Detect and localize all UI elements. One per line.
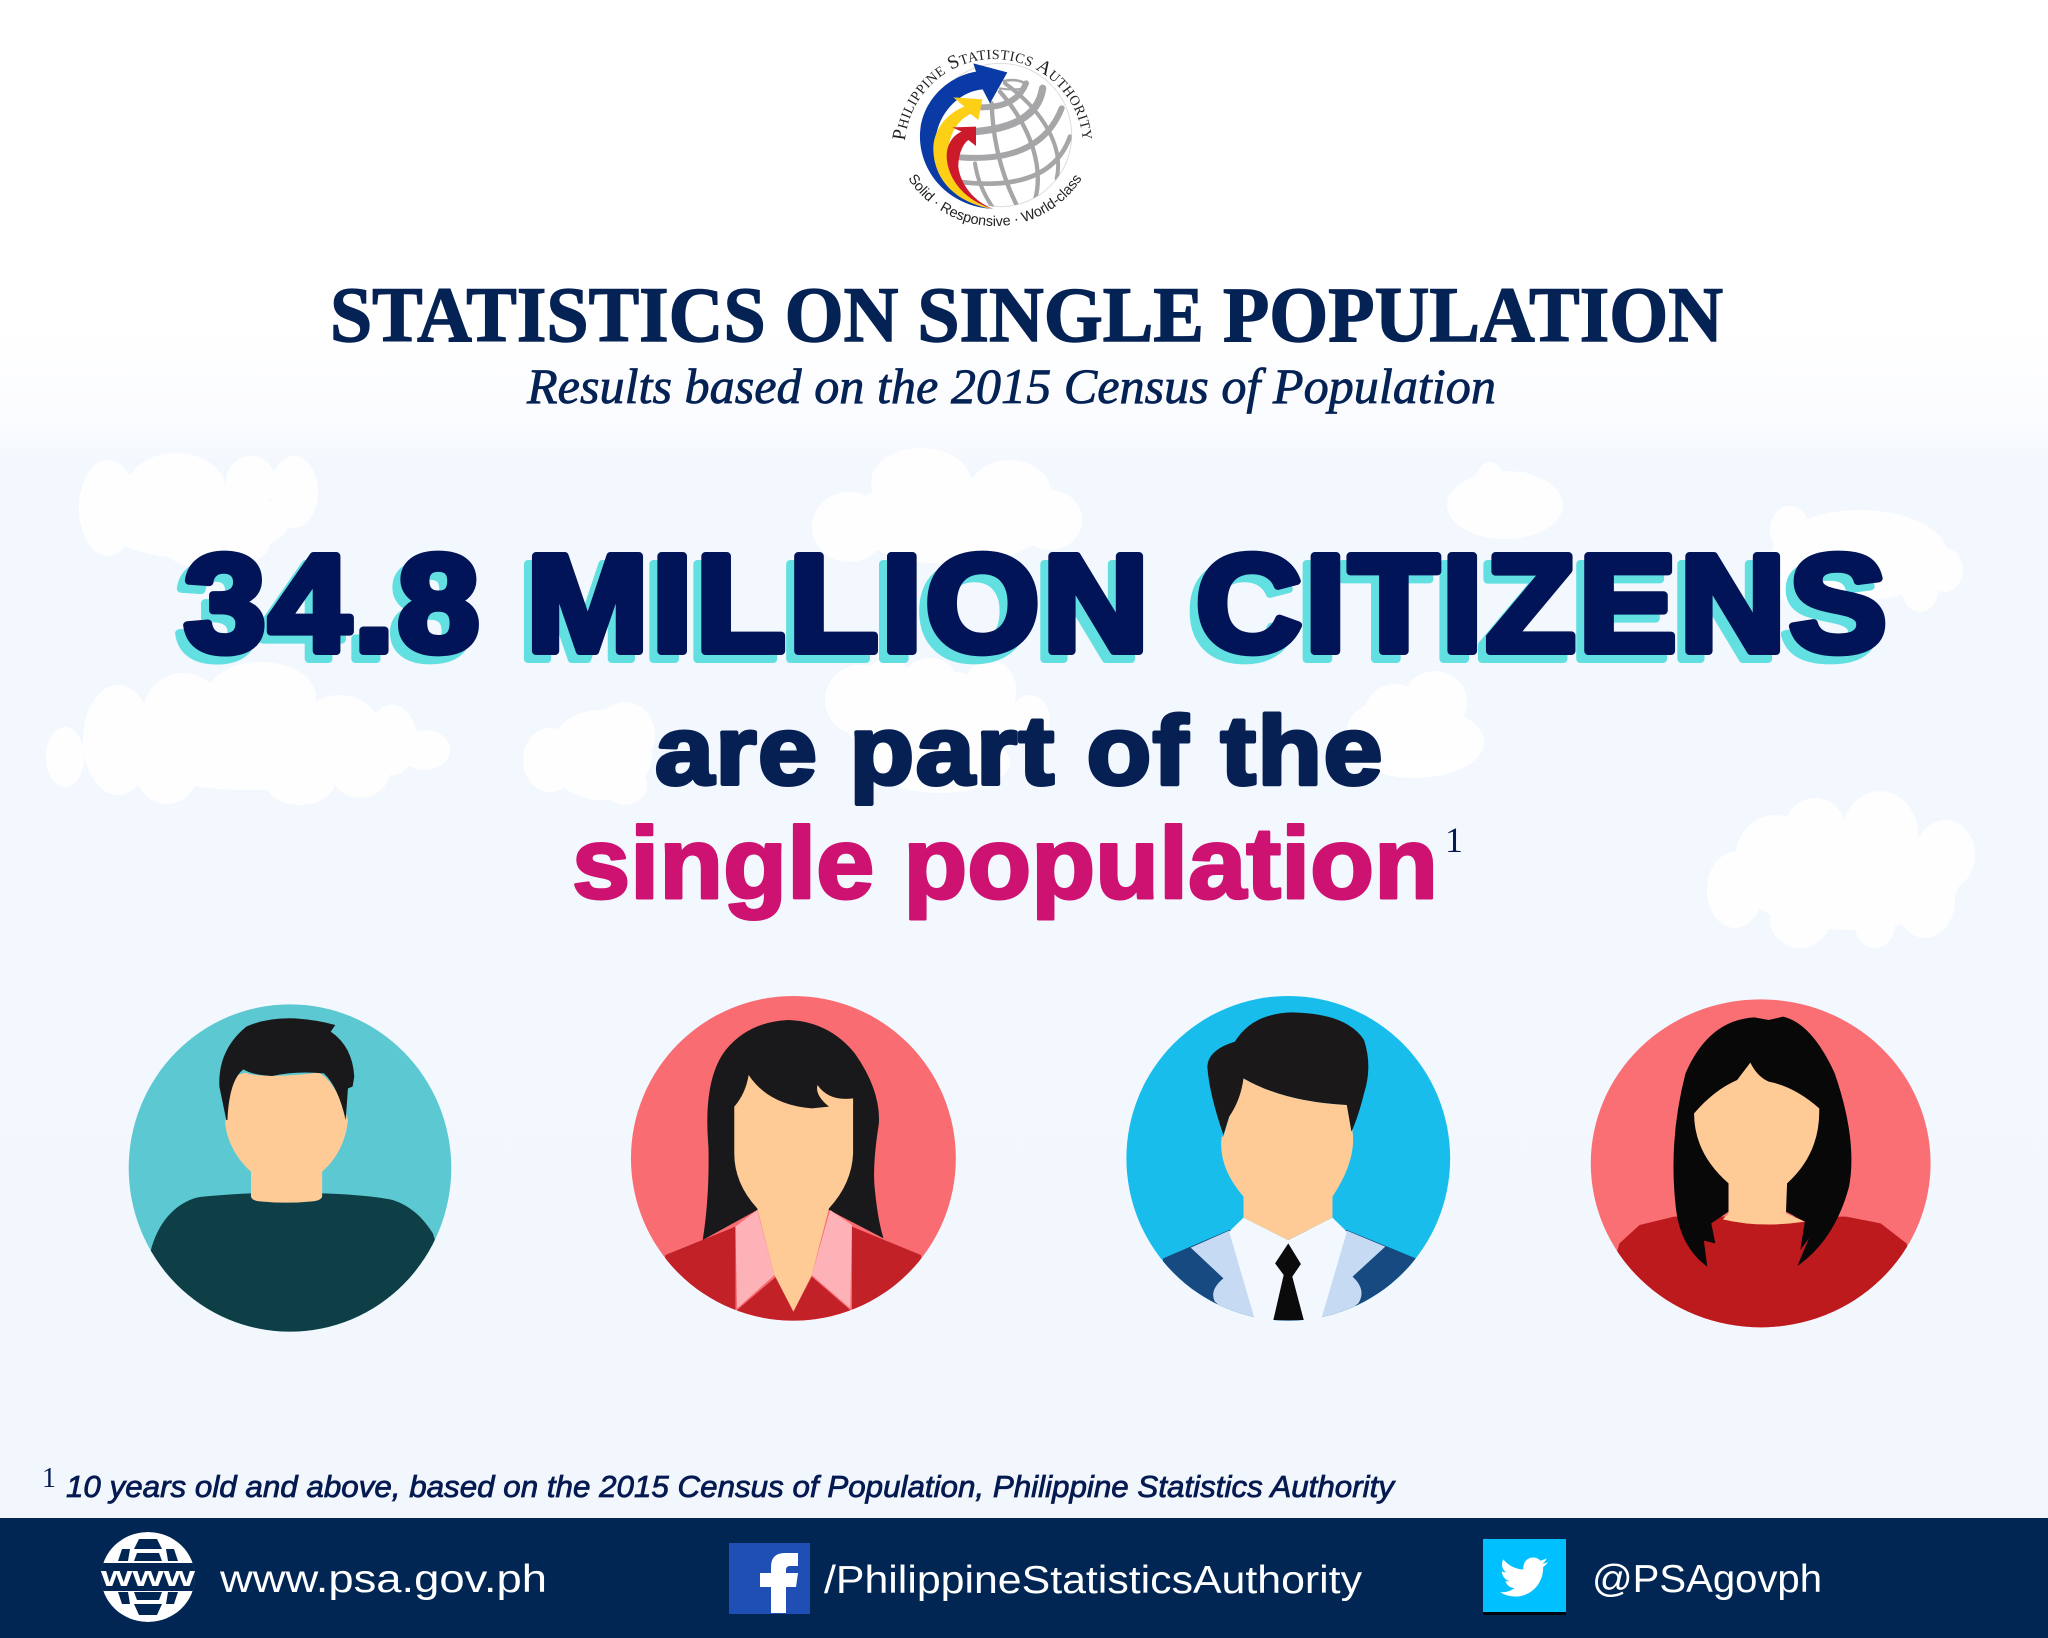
twitter handle: @PSAgovph [1592,1558,1822,1601]
avatar: man in suit and tie [1126,996,1450,1347]
headline shadow: 34.8 MILLION CITIZENS [176,535,1882,689]
icon: twitter [1483,1539,1566,1615]
logo motto text: Solid · Responsive · World-class [909,174,1081,226]
website text: www.psa.gov.ph [219,1558,547,1601]
headline text: 34.8 MILLION CITIZENS [184,527,1890,681]
cloud: right of citizens [1770,506,1963,612]
logo globe [954,63,1072,207]
logo blue arrow [920,63,1007,209]
cloud: centre [825,658,1050,793]
cloud: lower left [46,662,450,805]
footer bar [0,1518,2048,1638]
footnote marker: 1 [42,1463,56,1494]
cloud: right of the [1346,671,1484,778]
title: STATISTICS ON SINGLE POPULATION [330,271,1723,358]
subtitle: Results based on the 2015 Census of Population [526,358,1496,414]
icon: www globe: www [100,1561,196,1593]
icon: facebook [729,1543,810,1614]
cloud: upper left [79,453,318,570]
avatar: woman with long hair in red top [1588,999,1932,1347]
facebook handle: /PhilippineStatisticsAuthority [824,1559,1363,1602]
logo name text: Philippine Statistics Authority [892,50,1092,140]
icon: www globe [100,1532,195,1622]
cloud: lower right [1707,791,1975,948]
avatar: man in dark sweater [128,1004,452,1332]
subheading: are part of the: are part of the [655,696,1384,805]
logo: Philippine Statistics Authority [892,50,1092,226]
footnote [42,1463,1397,1504]
clouds [46,448,1975,948]
cloud: behind are part [523,702,655,805]
cloud: upper centre [812,448,1082,564]
logo red arrow [947,127,993,209]
footnote text: 10 years old and above, based on the 2015 Census of Population, Philippine Statistics Authority [66,1469,1397,1504]
logo yellow arrow [933,97,993,209]
headline: 34.8 million citizens [176,527,1890,689]
superscript 1: 1 [1445,820,1463,860]
subheading: single population: single population [572,808,1438,920]
avatar: woman in red blazer [631,996,956,1347]
cloud: small top right [1447,462,1563,539]
